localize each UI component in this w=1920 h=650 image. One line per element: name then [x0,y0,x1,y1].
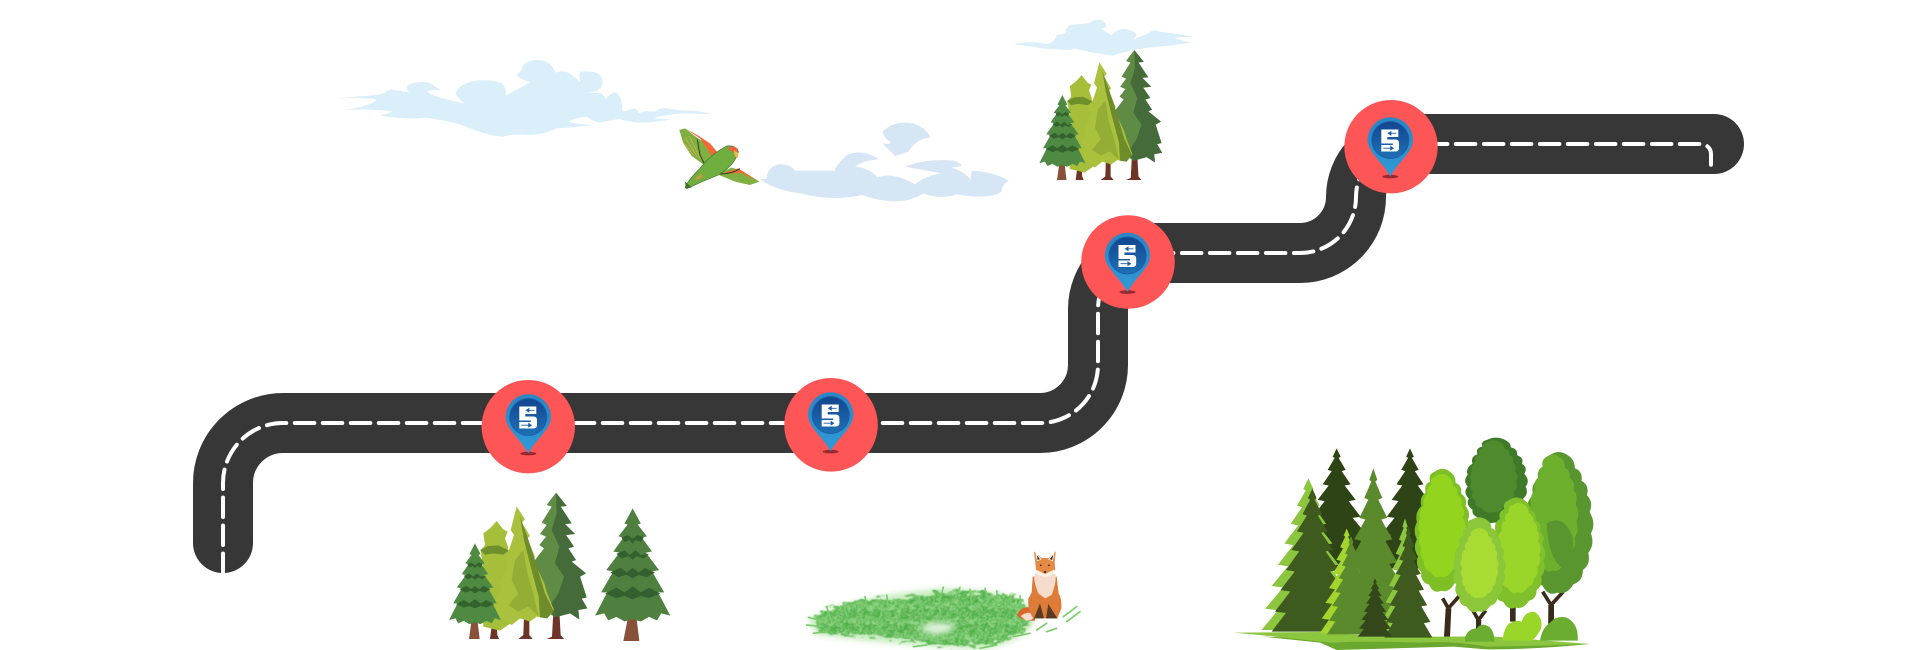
tree cluster: top, beside clouds [1039,50,1162,180]
icon: parrot in flight [679,128,759,189]
back dark tree [1465,438,1528,523]
head and ears [1034,551,1056,575]
small dark conifer [1358,578,1392,637]
cloud: top left [337,60,713,137]
mid conifer [1336,468,1410,633]
icon: fox [1017,551,1061,621]
tree: bright centre-right [1489,497,1545,608]
marker 2 [784,378,878,472]
left conifer [1261,478,1355,632]
cloud: top right [1013,20,1193,56]
right conifer [1380,518,1432,638]
trunks [1443,592,1563,620]
ground [1233,632,1590,650]
grass patch [807,587,1080,650]
body [1028,577,1061,618]
front conifer [1320,528,1375,634]
tree: small light front [1453,517,1506,612]
marker 4 [1344,100,1438,193]
marker 3 [1081,215,1175,309]
bushes [1465,612,1578,642]
road [223,144,1714,573]
lone spruce [595,508,670,641]
forest [1233,438,1593,650]
tree: tall bright [1415,469,1471,592]
tree: right [1525,452,1593,594]
tree cluster: below road with lone spruce [449,493,670,641]
back conifers [1300,448,1446,568]
marker 1 [482,380,575,473]
tail [1017,607,1035,621]
road centre dashes [223,144,1711,573]
cloud: centre [760,123,1009,201]
